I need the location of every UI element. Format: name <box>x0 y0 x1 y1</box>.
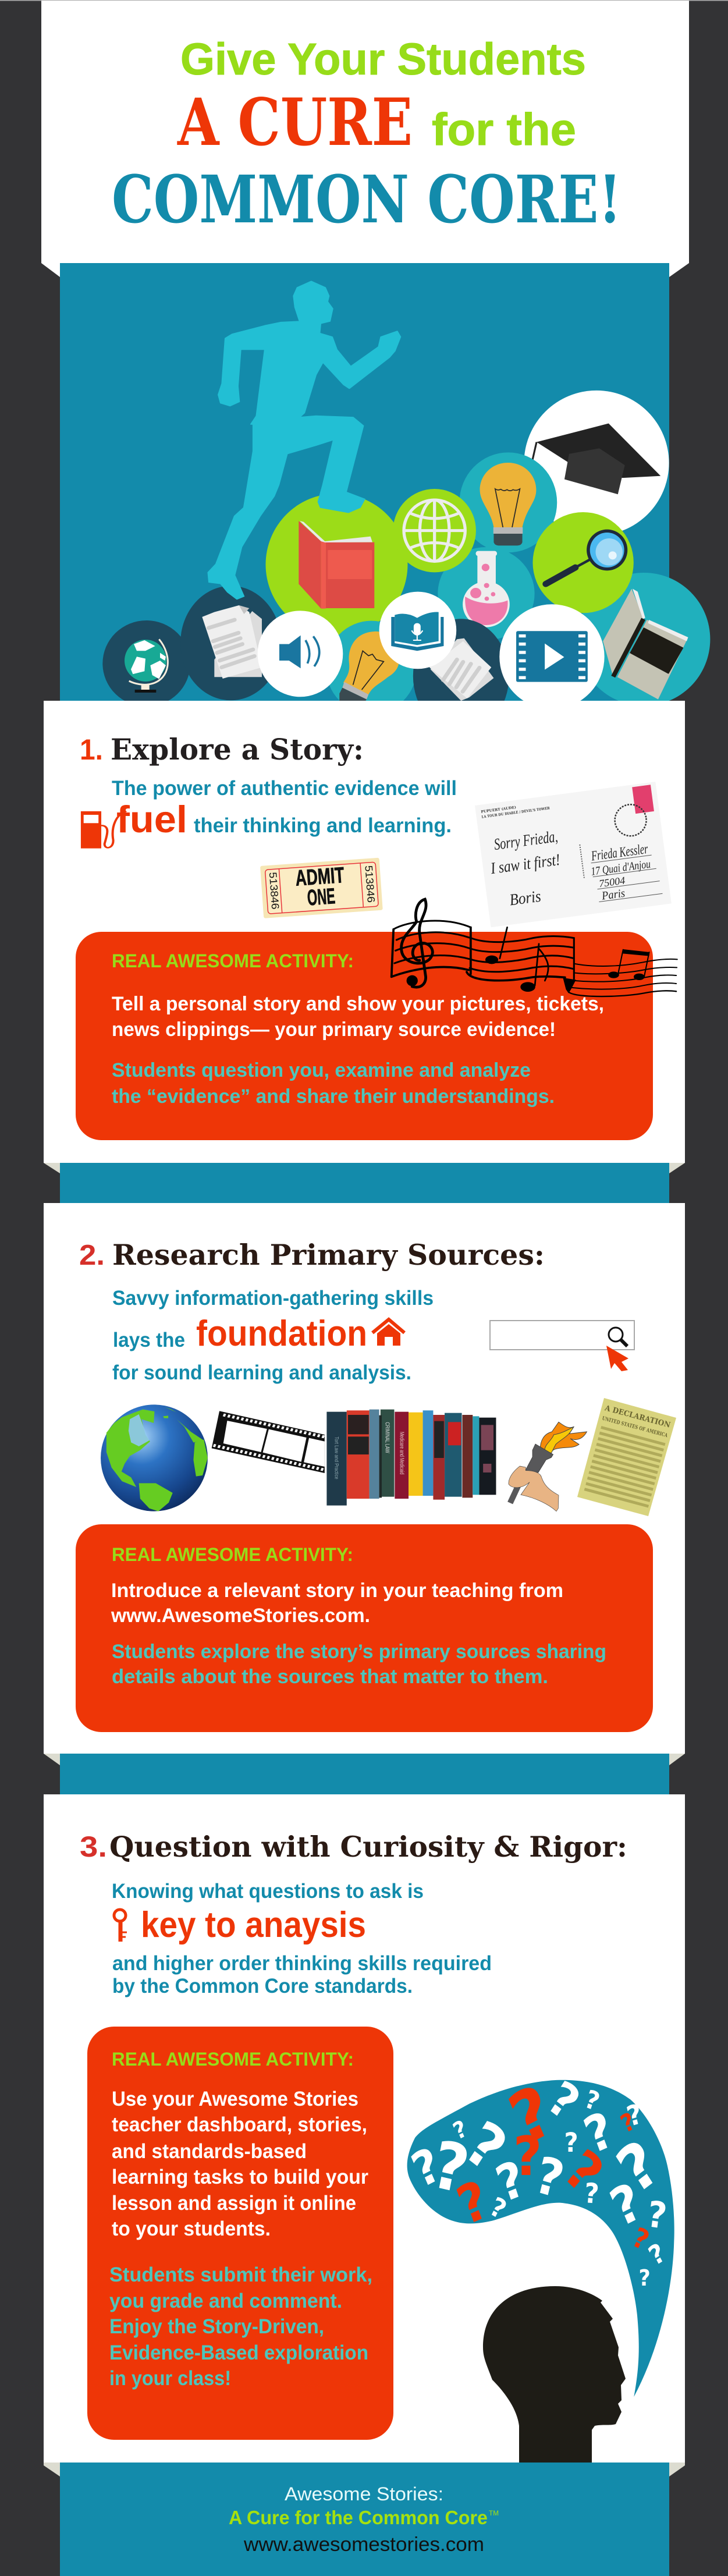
postcard: Paris <box>601 887 626 903</box>
postcard: 17 Quai d'Anjou <box>590 858 651 878</box>
music staff with treble clef and notes <box>392 899 677 996</box>
title line: A CURE: A CURE <box>177 85 413 161</box>
speech bubble of question marks: ? <box>628 2221 654 2257</box>
activity text mint: Evidence-Based exploration <box>109 2341 368 2364</box>
speech bubble of question marks: ? <box>602 2171 651 2239</box>
icon: house <box>372 1319 404 1346</box>
activity box 1 <box>76 932 653 1140</box>
fold corners above footer <box>44 2463 685 2476</box>
ticket: admit one: 513846 <box>363 865 377 903</box>
header banner <box>41 1 689 277</box>
heading: Question with Curiosity and Rigor: Question with Curiosity & Rigor: <box>109 1830 627 1864</box>
heading: Research Primary Sources: Research Primary Sources: <box>112 1238 545 1272</box>
activity box 1: news clippings— your primary source evidence! <box>112 1019 556 1041</box>
speech bubble of question marks: ? <box>538 2070 589 2131</box>
speech bubble of question marks: ? <box>638 2265 651 2291</box>
row of law books: Tort Law and Practice <box>333 1436 340 1479</box>
postcard: Sorry Frieda, <box>493 828 559 854</box>
activity text white <box>112 2088 368 2240</box>
icon circle: web globe <box>393 489 476 572</box>
speech bubble of question marks: ? <box>581 2084 603 2117</box>
activity text white: learning tasks to build your <box>112 2166 368 2188</box>
ticket: admit one <box>260 858 383 918</box>
speech bubble of question marks: ? <box>564 2128 578 2159</box>
intro text line 2: their thinking and learning. <box>194 814 452 837</box>
heading number 3: 3. <box>80 1830 107 1863</box>
icon circle: book with microphone <box>379 592 456 669</box>
activity box 2: www.AwesomeStories.com. <box>111 1605 370 1627</box>
runner silhouette <box>208 281 400 599</box>
activity text white: Use your Awesome Stories <box>112 2088 358 2110</box>
heading number 2: 2. <box>79 1240 105 1271</box>
word: foundation: foundation <box>196 1314 367 1354</box>
activity text white: and standards-based <box>112 2140 307 2163</box>
postcard: LA TOUR DU DIABLE / DEVIL'S TOWER <box>481 806 551 819</box>
speech bubble of question marks: ? <box>489 2150 532 2214</box>
row of law books <box>326 1410 496 1506</box>
fold corners below panel 1 <box>44 1163 685 1173</box>
title line: for the: for the <box>432 104 576 155</box>
activity label: REAL AWESOME ACTIVITY: <box>112 1544 353 1565</box>
speech bubble of question marks: ? <box>449 2115 471 2145</box>
activity text mint: Students submit their work, <box>109 2263 372 2286</box>
activity box 2 <box>76 1524 653 1732</box>
globe <box>101 1404 208 1511</box>
icon: fuel pump <box>81 811 126 849</box>
icon circle: paper two <box>413 619 509 733</box>
ticket: admit one: ADMIT <box>294 863 345 891</box>
heading number 1: 1. <box>80 733 103 766</box>
activity box 3 <box>87 2027 393 2440</box>
panel 3: Question with Curiosity and Rigor: by the Common Core standards. <box>112 1975 413 1997</box>
postcard: PUPUERT (AUDE) <box>481 806 516 814</box>
panel 1: Explore a Story <box>44 701 685 1163</box>
speech bubble of question marks: ? <box>485 2192 510 2226</box>
declaration document: A DECLARATION <box>603 1404 672 1430</box>
speech bubble of question marks: ? <box>404 2137 449 2199</box>
icon: cursor arrow <box>606 1346 628 1371</box>
intro text: Knowing what questions to ask is <box>112 1880 424 1903</box>
panel 2: Research Primary Sources: lays the <box>113 1329 185 1351</box>
activity box 1: the “evidence” and share their understandings. <box>112 1085 555 1108</box>
torch held in hand <box>509 1422 587 1511</box>
icon circle: paper document <box>180 586 281 700</box>
speech bubble of question marks: ? <box>553 2138 614 2206</box>
speech bubble of question marks: ? <box>605 2126 672 2208</box>
postcard <box>475 782 672 927</box>
title line: Give Your Students: Give Your Students <box>180 34 586 84</box>
speech bubble of question marks: ? <box>499 2070 564 2162</box>
postcard: 75004 <box>598 875 626 889</box>
trademark: TM <box>489 2509 499 2517</box>
postcard: Boris <box>509 888 542 909</box>
icon circle: video <box>499 604 605 709</box>
footer line 2: A Cure for the Common Core <box>229 2507 488 2528</box>
activity text mint: Students explore the story’s primary sources sharing <box>112 1641 606 1663</box>
activity label: REAL AWESOME ACTIVITY: <box>112 2049 354 2070</box>
speech bubble of question marks: ? <box>426 2127 475 2209</box>
speech bubble of question marks: ? <box>454 2107 518 2186</box>
icon circle: magnifying glass <box>532 512 634 613</box>
speech bubble of question marks <box>404 2070 674 2397</box>
speech bubble of question marks: ? <box>577 2101 622 2165</box>
film strip <box>212 1411 325 1473</box>
fold corners below panel 2 <box>44 1754 685 1765</box>
icon circle: open book right <box>577 573 710 706</box>
speech bubble of question marks: ? <box>530 2145 570 2210</box>
speech bubble of question marks: ? <box>644 2238 670 2272</box>
icon circle: graduation cap <box>524 391 669 535</box>
activity label: REAL AWESOME ACTIVITY: <box>112 950 354 971</box>
speech bubble of question marks: ? <box>645 2193 669 2237</box>
activity text mint: Students question you, examine and analyze <box>112 1059 531 1081</box>
activity text white: Introduce a relevant story in your teaching from <box>111 1580 563 1602</box>
footer band <box>60 2463 669 2576</box>
icon circle: red book <box>265 494 407 636</box>
activity text mint: in your class! <box>109 2367 231 2390</box>
activity box 2: details about the sources that matter to them. <box>112 1666 548 1688</box>
word: fuel: fuel <box>116 798 187 840</box>
row of law books: Medicare and Medicaid <box>399 1432 405 1474</box>
speech bubble of question marks: ? <box>449 2169 496 2237</box>
panel 2: Research Primary Sources <box>44 1203 685 1754</box>
activity text mint: Enjoy the Story-Driven, <box>109 2315 324 2338</box>
heading: Explore a Story: Explore a Story: <box>111 732 364 767</box>
row of law books: CRIMINAL LAW <box>384 1422 391 1453</box>
speech bubble of question marks: ? <box>513 2125 542 2188</box>
postcard: Frieda Kessler <box>590 842 649 864</box>
phrase: key to anaysis: key to anaysis <box>141 1905 366 1945</box>
intro text: Savvy information-gathering skills <box>112 1287 434 1310</box>
speech bubble of question marks: ? <box>624 2098 645 2133</box>
icon circle: light bulb <box>459 452 557 552</box>
icon: key <box>114 1910 127 1942</box>
ticket: admit one: ONE <box>307 884 336 910</box>
footer website: www.awesomestories.com <box>243 2534 484 2556</box>
panel 2: Research Primary Sources: for sound learning and analysis. <box>112 1361 411 1384</box>
declaration document <box>577 1398 676 1516</box>
panel 3: Question with Curiosity and Rigor: and higher order thinking skills required <box>112 1952 492 1975</box>
activity text white: to your students. <box>112 2217 271 2240</box>
icon circle: globe on stand <box>102 620 190 707</box>
speech bubble of question marks: ? <box>617 2107 640 2139</box>
search box <box>490 1321 634 1350</box>
activity text white: teacher dashboard, stories, <box>112 2113 367 2136</box>
panel 3: Question with Curiosity and Rigor <box>44 1794 685 2463</box>
activity text mint: you grade and comment. <box>109 2290 342 2312</box>
declaration document: UNITED STATES OF AMERICA <box>601 1416 669 1439</box>
activity text mint <box>109 2263 372 2390</box>
activity text white: lesson and assign it online <box>112 2192 356 2215</box>
footer line 1: Awesome Stories: <box>285 2483 443 2504</box>
speech bubble of question marks: ? <box>583 2177 600 2210</box>
intro text line 1: The power of authentic evidence will <box>112 777 457 800</box>
hero illustration: runner climbing icons <box>102 281 710 733</box>
postcard: I saw it first! <box>489 851 561 878</box>
title line: COMMON CORE!: COMMON CORE! <box>112 162 622 238</box>
icon circle: flask <box>438 547 535 640</box>
activity text white: Tell a personal story and show your pictures, tickets, <box>112 993 604 1015</box>
ticket: admit one: 513846 <box>267 872 281 910</box>
icon circle: speaker <box>258 611 343 697</box>
head silhouette <box>483 2286 626 2463</box>
icon circle: bulb lower <box>326 621 417 714</box>
